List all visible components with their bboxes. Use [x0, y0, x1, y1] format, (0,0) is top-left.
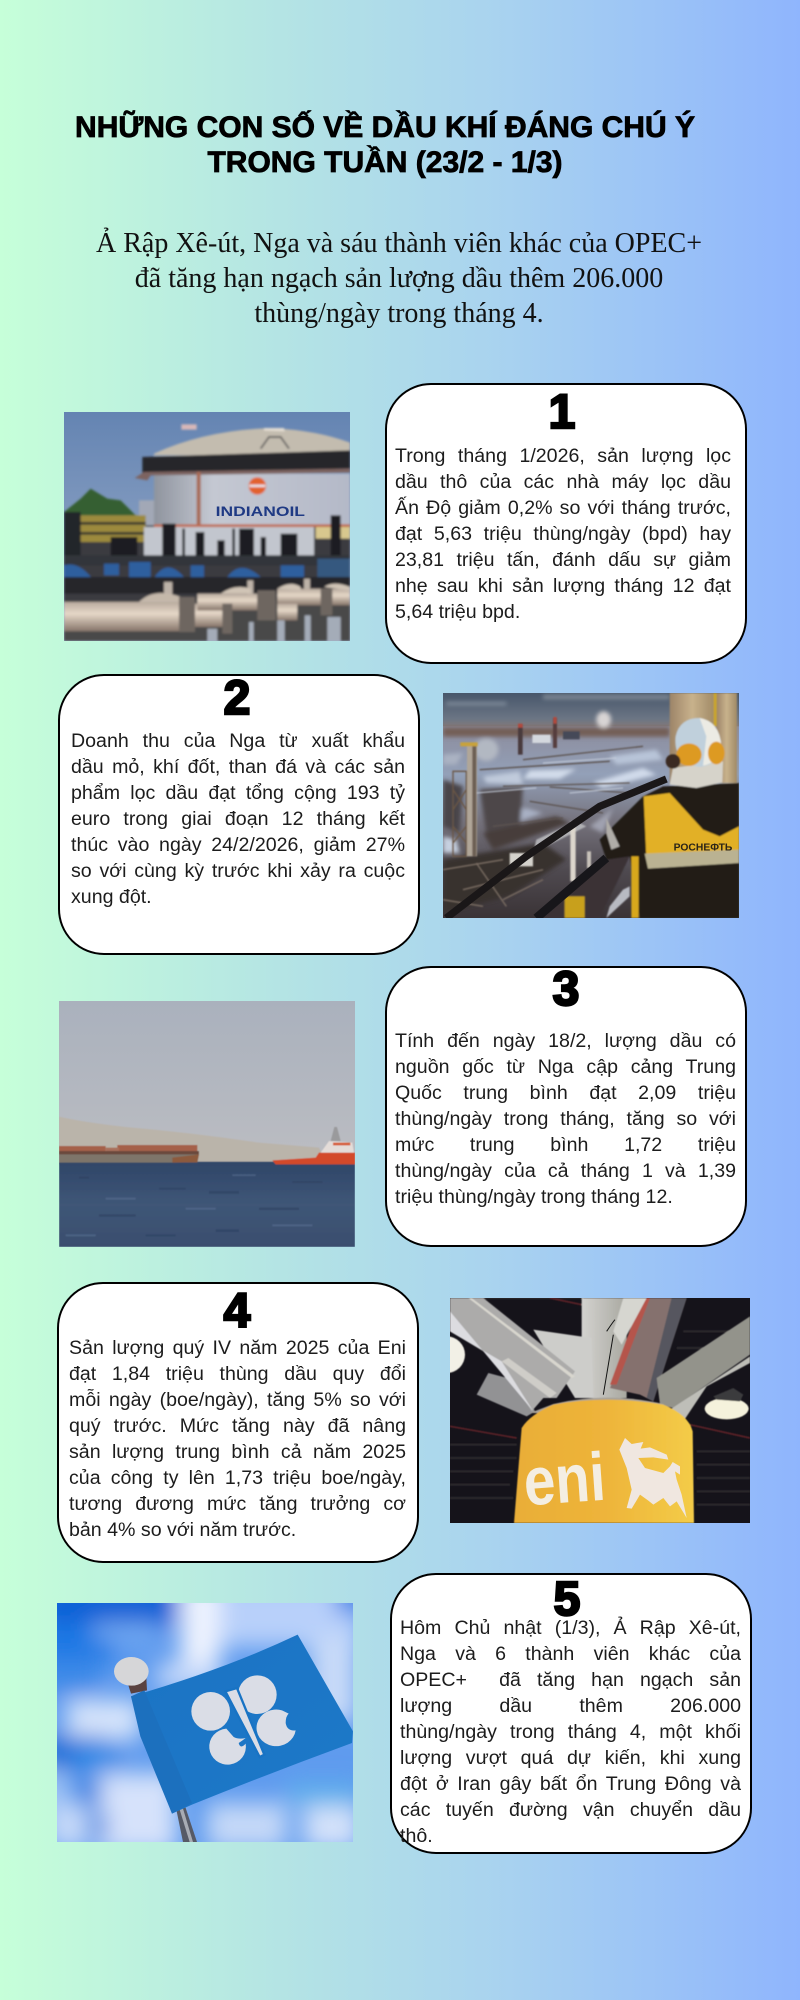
panel: card 2 background [58, 674, 420, 955]
photo: OPEC flag [57, 1603, 353, 1842]
text block 4: của công ty lên 1,73 triệu boe/ngày, [69, 1467, 406, 1489]
number 1: 1 [549, 386, 575, 439]
eni wordmark: eni [521, 1439, 608, 1520]
text block 2: Doanh thu của Nga từ xuất khẩu [71, 730, 405, 752]
text block 3 [395, 1030, 736, 1208]
text block 2: dầu mỏ, khí đốt, than đá và các sản [71, 756, 405, 778]
text block 5: thô. [400, 1825, 433, 1847]
photo: Rosneft worker overlooking refinery: РОСНЕФТЬ [674, 843, 732, 854]
card 5 [390, 1573, 752, 1854]
text block 3: triệu thùng/ngày trong tháng 12. [395, 1186, 673, 1208]
photo: Rosneft worker overlooking refinery [443, 693, 739, 918]
text block 4: đạt 1,84 triệu thùng dầu quy đổi [69, 1363, 406, 1385]
card 2 [58, 672, 420, 955]
text block 5: đột ở Iran gây bất ổn Trung Đông và [400, 1773, 741, 1795]
panel: card 4 background [56, 1282, 418, 1563]
text block 4: Sản lượng quý IV năm 2025 của Eni [69, 1337, 406, 1359]
text block 4: bản 4% so với năm trước. [69, 1519, 296, 1541]
card 4 [57, 1282, 419, 1563]
panel: card 1 background [385, 383, 747, 664]
text block 2 [71, 730, 405, 908]
title [75, 110, 696, 179]
number 3: 3 [553, 963, 579, 1016]
title: NHỮNG CON SỐ VỀ DẦU KHÍ ĐÁNG CHÚ Ý [75, 111, 695, 144]
subtitle: đã tăng hạn ngạch sản lượng dầu thêm 206.000 [135, 263, 663, 294]
text block 1: Ấn Độ giảm 0,2% so với tháng trước, [395, 497, 731, 519]
text block 5: OPEC+ đã tăng hạn ngạch sản [400, 1669, 741, 1691]
text block 4 [69, 1337, 406, 1541]
card 1 [385, 383, 747, 664]
text block 5 [400, 1616, 742, 1847]
number 5: 5 [554, 1573, 580, 1626]
title: TRONG TUẦN (23/2 - 1/3) [207, 146, 563, 179]
text block 4: sản lượng trung bình cả năm 2025 [69, 1441, 406, 1463]
panel: card 5 background [390, 1573, 752, 1854]
text block 5: Nga và 6 thành viên khác của [400, 1643, 741, 1665]
eni dog logo [619, 1438, 687, 1518]
text block 2: so với cùng kỳ trước khi xảy ra cuộc [71, 860, 405, 882]
text block 3: mức trung bình 1,72 triệu [395, 1134, 736, 1156]
subtitle [96, 228, 702, 329]
text block 1: nhẹ sau khi sản lượng tháng 12 đạt [395, 575, 731, 597]
text block 2: xung đột. [71, 886, 152, 908]
panel: card 3 background [385, 966, 747, 1247]
subtitle: thùng/ngày trong tháng 4. [254, 298, 544, 329]
text block 2: euro trong giai đoạn 12 tháng kết [71, 808, 405, 830]
text block 1: Trong tháng 1/2026, sản lượng lọc [395, 445, 731, 467]
photo: Eni yellow column with logo [450, 1298, 750, 1523]
card 3 [385, 963, 747, 1247]
text block 3: nguồn gốc từ Nga cập cảng Trung [395, 1056, 736, 1078]
text block 4: mỗi ngày (boe/ngày), tăng 5% so với [69, 1389, 406, 1411]
text block 3: thùng/ngày của cả tháng 1 và 1,39 [395, 1160, 736, 1182]
text block 5: Hôm Chủ nhật (1/3), Ả Rập Xê-út, [400, 1617, 741, 1639]
text block 5: thùng/ngày trong tháng 4, một khối [400, 1721, 741, 1743]
text block 1: dầu thô của các nhà máy lọc dầu [395, 471, 731, 493]
text block 1: đạt 5,63 triệu thùng/ngày (bpd) hay [395, 523, 731, 545]
number 2: 2 [224, 672, 250, 725]
text block 5: lượng dầu thêm 206.000 [400, 1695, 741, 1717]
subtitle: Ả Rập Xê-út, Nga và sáu thành viên khác của OPEC+ [96, 228, 702, 259]
text block 3: thùng/ngày trong tháng, tăng so với [395, 1108, 736, 1130]
photo: Indian Oil storage tank: INDIANOIL [216, 503, 306, 519]
text block 2: phẩm lọc dầu đạt tổng cộng 193 tỷ [71, 782, 405, 804]
number 4: 4 [224, 1285, 250, 1338]
text block 5: lượng vượt quá dự kiến, khi xung [400, 1747, 741, 1769]
text block 4: tương đương mức tăng trưởng cơ [69, 1493, 406, 1515]
text block 1 [395, 445, 731, 623]
text block 3: Tính đến ngày 18/2, lượng dầu có [395, 1030, 736, 1052]
text block 3: Quốc trung bình đạt 2,09 triệu [395, 1082, 736, 1104]
text block 4: quý trước. Mức tăng này đã nâng [69, 1415, 406, 1437]
text block 5: các tuyến đường vận chuyển dầu [400, 1799, 741, 1821]
text block 1: 5,64 triệu bpd. [395, 601, 520, 623]
text block 2: thúc vào ngày 24/2/2026, giảm 27% [71, 834, 405, 856]
photo: Indian Oil storage tank [64, 412, 350, 641]
photo: barge and tugboat at sea [59, 1001, 355, 1247]
text block 1: 23,81 triệu tấn, đánh dấu sự giảm [395, 549, 731, 571]
